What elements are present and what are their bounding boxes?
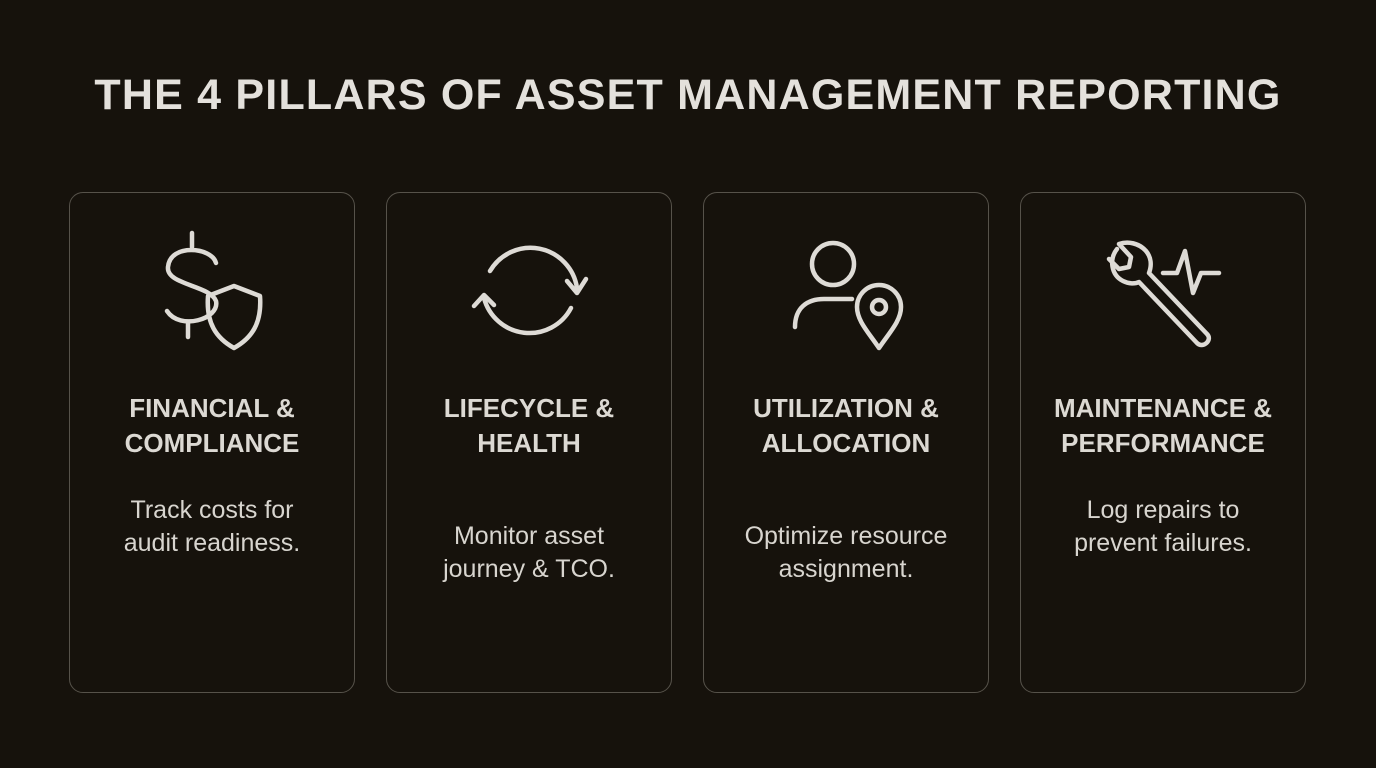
panel: lifecycle & health <box>386 192 672 693</box>
heading <box>444 393 614 458</box>
heading: FINANCIAL & <box>129 393 295 423</box>
heading: COMPLIANCE <box>125 428 299 458</box>
text: Monitor asset <box>454 522 604 550</box>
heading: HEALTH <box>477 428 581 458</box>
text: prevent failures. <box>1074 529 1252 557</box>
title: THE 4 PILLARS OF ASSET MANAGEMENT REPORTING <box>94 71 1282 119</box>
icon: dollar and shield <box>164 230 262 350</box>
text <box>442 522 615 583</box>
panel: utilization & allocation <box>703 192 989 693</box>
heading: MAINTENANCE & <box>1054 393 1272 423</box>
panel: maintenance & performance <box>1020 192 1306 693</box>
text <box>1074 496 1252 557</box>
heading <box>753 393 939 458</box>
text: Optimize resource <box>745 522 947 550</box>
heading: UTILIZATION & <box>753 393 939 423</box>
text <box>745 522 947 583</box>
heading <box>1054 393 1272 458</box>
heading: LIFECYCLE & <box>444 393 614 423</box>
icon: wrench and pulse <box>1106 240 1222 348</box>
text: assignment. <box>779 555 913 583</box>
panel: financial & compliance <box>69 192 355 693</box>
text: Track costs for <box>130 496 294 524</box>
heading: PERFORMANCE <box>1061 428 1265 458</box>
icon: person and location pin <box>792 240 904 350</box>
text: audit readiness. <box>124 529 300 557</box>
text <box>124 496 300 557</box>
text: Log repairs to <box>1087 496 1239 524</box>
heading <box>125 393 299 458</box>
text: journey & TCO. <box>443 555 615 583</box>
heading: ALLOCATION <box>762 428 930 458</box>
icon: cycle arrows <box>472 246 588 336</box>
